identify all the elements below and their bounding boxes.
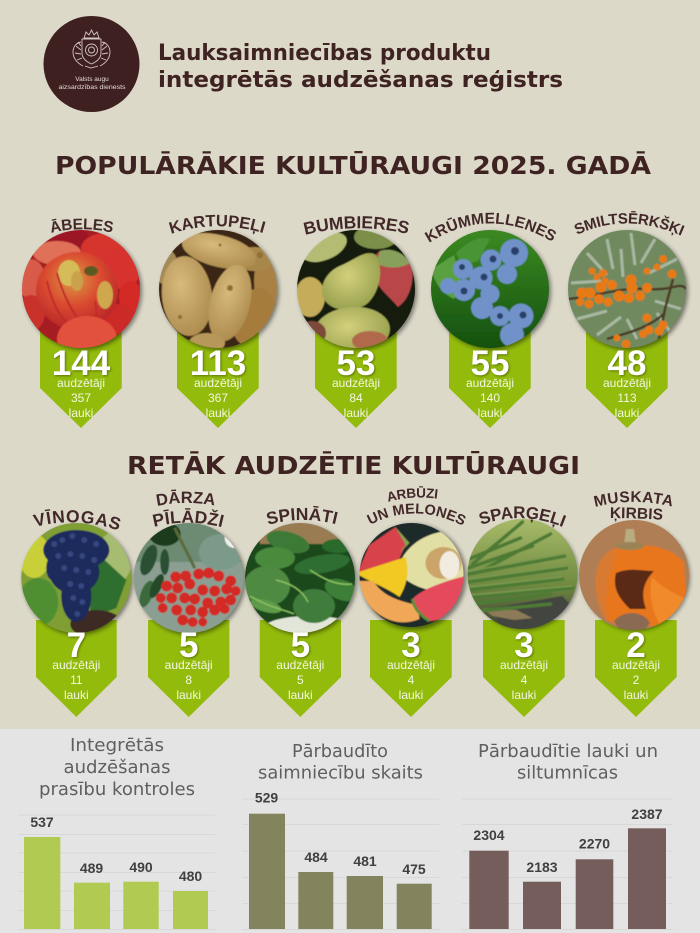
card: apples (21, 218, 145, 428)
growers and fields: lauki (206, 406, 230, 420)
count: 144 (52, 344, 111, 383)
photo: pears (297, 230, 415, 348)
pennant (449, 330, 531, 428)
values: 2304 (473, 827, 505, 843)
count: 7 (67, 626, 86, 665)
pennant (177, 330, 259, 428)
photo: apples (22, 230, 140, 348)
card: blueberries (424, 212, 556, 428)
chart title: Pārbaudīto (292, 742, 388, 762)
card: pears (296, 216, 420, 428)
photo: asparagus (466, 518, 578, 630)
growers and fields (52, 658, 100, 702)
growers and fields: audzētāji (466, 376, 514, 390)
values (473, 806, 663, 875)
count: 5 (291, 626, 310, 665)
chart title (478, 742, 658, 784)
count: 3 (514, 626, 534, 665)
pennant (315, 330, 397, 428)
card: spinach (244, 506, 360, 717)
growers and fields: audzētāji (603, 376, 651, 390)
crop name: ĶIRBIS (610, 507, 662, 522)
pennant (260, 620, 341, 717)
photo: sea buckthorn (567, 229, 687, 349)
growers and fields: 8 (185, 673, 192, 687)
main title: integrētās audzēšanas reģistrs (158, 67, 563, 93)
count: 48 (608, 344, 646, 383)
growers and fields (332, 376, 380, 420)
values: 475 (402, 861, 426, 877)
values: 2387 (631, 806, 663, 822)
growers and fields (165, 658, 213, 702)
growers and fields (276, 658, 324, 702)
values: 2183 (526, 859, 558, 875)
values: 537 (30, 814, 54, 830)
photo: rowan (133, 522, 245, 634)
values (30, 814, 202, 884)
count: 113 (190, 344, 246, 383)
chart: inspections (18, 736, 215, 930)
growers and fields: lauki (478, 406, 502, 420)
main title: Lauksaimniecības produktu (158, 40, 491, 66)
growers and fields: 84 (349, 391, 363, 405)
growers and fields: 367 (208, 391, 228, 405)
crop name (366, 486, 466, 525)
count: 2 (626, 626, 646, 665)
logo text: Valsts augu (75, 76, 109, 83)
growers and fields: lauki (615, 406, 639, 420)
bars (469, 828, 666, 929)
values: 2270 (579, 836, 610, 852)
crop name: DĀRZA (156, 490, 214, 506)
values: 481 (353, 853, 377, 869)
chart: farms inspected (242, 742, 439, 930)
growers and fields: 4 (521, 673, 528, 687)
growers and fields: lauki (64, 688, 89, 702)
header logo (44, 16, 140, 112)
growers and fields (466, 376, 514, 420)
photo: pumpkin (578, 519, 690, 631)
growers and fields: audzētāji (57, 376, 105, 390)
crop name: SPINĀTI (266, 506, 338, 524)
chart title: saimniecību skaits (258, 764, 423, 784)
chart title: prasību kontroles (39, 780, 195, 800)
photo: grapes (18, 522, 132, 638)
chart title: audzēšanas (64, 758, 170, 778)
chart title (258, 742, 423, 784)
crop name (152, 490, 224, 527)
card: asparagus (468, 506, 580, 717)
card: potatoes (158, 214, 282, 428)
growers and fields: lauki (176, 688, 201, 702)
crop name: MUSKATA (594, 491, 672, 507)
pennant (36, 620, 117, 717)
card: pumpkin (579, 491, 693, 717)
growers and fields: lauki (69, 406, 93, 420)
growers and fields: audzētāji (387, 658, 435, 672)
growers and fields: audzētāji (276, 658, 324, 672)
growers and fields (603, 376, 651, 420)
crop name: BUMBIERES (304, 216, 409, 235)
bars (249, 814, 432, 929)
chart title: Pārbaudītie lauki un (478, 742, 658, 762)
heading: rarely grown crops: RETĀK AUDZĒTIE KULTŪRAUGI (127, 450, 580, 480)
count: 53 (337, 344, 375, 383)
growers and fields: audzētāji (194, 376, 242, 390)
crop name: ĀBELES (51, 218, 113, 233)
bars (24, 837, 208, 929)
photo: melons (360, 523, 464, 627)
pennant (40, 330, 122, 428)
crop name: PĪLĀDŽI (152, 508, 224, 527)
count: 3 (401, 626, 421, 665)
main title (158, 40, 563, 93)
icon: coat of arms (73, 30, 110, 68)
growers and fields (387, 658, 435, 702)
growers and fields: audzētāji (332, 376, 380, 390)
count: 55 (471, 344, 509, 383)
card: grapes (20, 509, 135, 717)
growers and fields: lauki (624, 688, 648, 702)
crop name: KARTUPEĻI (168, 214, 266, 234)
values: 529 (255, 790, 278, 806)
growers and fields: audzētāji (165, 658, 213, 672)
growers and fields (500, 658, 548, 702)
growers and fields (57, 376, 105, 420)
card: sea buckthorn (567, 211, 691, 428)
growers and fields (612, 658, 660, 702)
growers and fields: lauki (344, 406, 368, 420)
growers and fields: lauki (288, 688, 313, 702)
growers and fields: audzētāji (612, 658, 660, 672)
values: 484 (304, 849, 328, 865)
growers and fields (194, 376, 242, 420)
values: 480 (179, 868, 202, 884)
crop name: UN MELONES (366, 504, 466, 525)
chart title: siltumnīcas (517, 764, 618, 784)
pennant (148, 620, 229, 717)
pennant (586, 330, 668, 428)
growers and fields: lauki (399, 688, 423, 702)
heading: popular crops: POPULĀRĀKIE KULTŪRAUGI 2025. GADĀ (55, 150, 652, 180)
pennant (483, 620, 565, 717)
growers and fields: 113 (617, 391, 637, 405)
logo text: aizsardzības dienests (58, 84, 126, 91)
values: 490 (129, 859, 153, 875)
photo: spinach (245, 523, 355, 633)
crop name: VĪNOGAS (32, 509, 120, 530)
growers and fields: 140 (480, 391, 500, 405)
count: 5 (179, 626, 198, 665)
logo text (58, 76, 126, 91)
values (255, 790, 426, 877)
growers and fields: 2 (633, 673, 640, 687)
crop name: KRŪMMELLENES (424, 212, 556, 242)
crop name (594, 491, 672, 522)
chart title: Integrētās (70, 736, 164, 756)
crop name: SMILTSĒRKŠĶI (574, 211, 684, 236)
growers and fields: audzētāji (52, 658, 100, 672)
card: rowan (133, 490, 247, 717)
growers and fields: 11 (70, 673, 83, 687)
photo: blueberries (430, 229, 550, 349)
photo: potatoes (159, 230, 277, 348)
card: melons (358, 486, 468, 717)
growers and fields: 5 (297, 673, 304, 687)
crop name: SPARĢEĻI (479, 506, 566, 528)
pennant (595, 620, 677, 717)
chart: fields and greenhouses (462, 742, 673, 930)
crop name: ARBŪZI (388, 486, 438, 502)
values: 489 (80, 860, 103, 876)
chart title (39, 736, 195, 800)
growers and fields: 357 (71, 391, 91, 405)
pennant (370, 620, 452, 717)
growers and fields: audzētāji (500, 658, 548, 672)
growers and fields: lauki (512, 688, 536, 702)
growers and fields: 4 (408, 673, 415, 687)
panel: statistics (0, 729, 700, 933)
